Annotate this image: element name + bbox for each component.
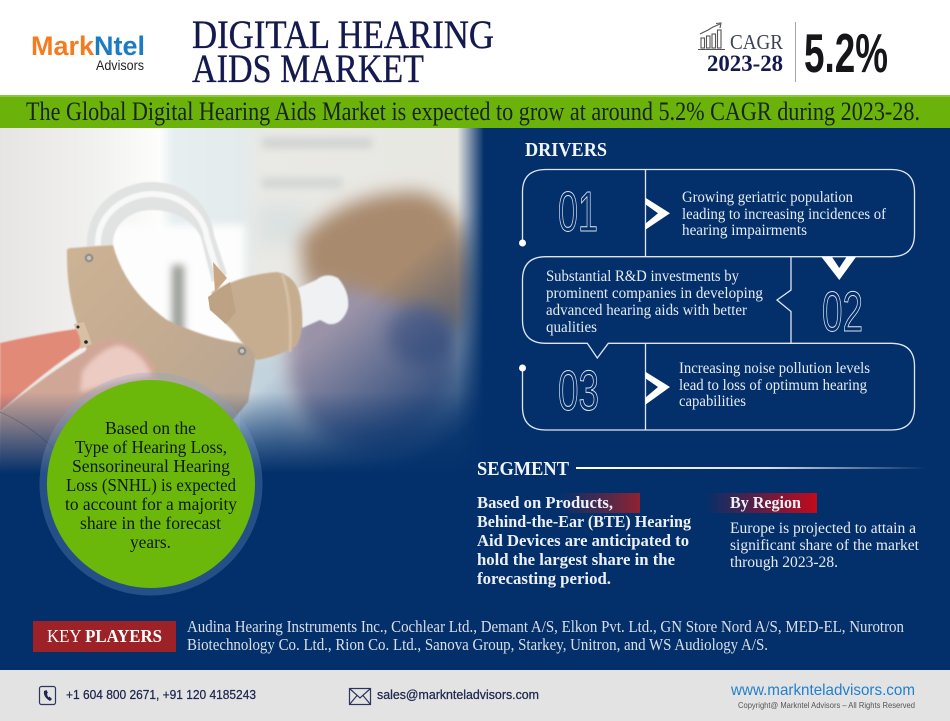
callout: green circle: years. [130, 532, 171, 552]
driver 3 text [679, 360, 870, 410]
driver 2 text [546, 268, 763, 336]
panel: drivers flow [519, 170, 914, 430]
hearing aid body [67, 245, 255, 440]
key players [33, 617, 904, 654]
arrow: driver 1 [645, 198, 670, 230]
blue vignette on photo [240, 228, 483, 470]
callout: green circle: Type of Hearing Loss, [75, 437, 227, 457]
driver 3 text: lead to loss of optimum hearing [679, 377, 867, 394]
segment: products [477, 493, 691, 588]
photo: hearing aid held in fingers [0, 128, 483, 470]
drivers heading: DRIVERS [525, 139, 607, 161]
callout: green circle [40, 372, 262, 596]
icon: growth chart [698, 23, 725, 50]
transparent tube [87, 182, 227, 282]
segment: products: Based on Products, [477, 493, 613, 512]
CAGR block: CAGR [730, 30, 783, 54]
header: logo: MarkNtel [31, 31, 145, 61]
segment: products: hold the largest share in the [477, 550, 675, 569]
footer [0, 670, 950, 721]
thumb and hand [0, 339, 158, 466]
icon: phone [40, 686, 56, 704]
callout: green circle: share in the forecast [80, 513, 221, 533]
arrow: driver 2 [822, 257, 856, 280]
connector outlines [522, 170, 914, 430]
segment heading: SEGMENT [477, 458, 570, 480]
number 02: 02 [822, 280, 863, 344]
footer: www.marknteladvisors.com [730, 682, 915, 699]
footer: sales@marknteladvisors.com [377, 688, 539, 702]
footer: Copyright@ Markntel Advisors – All Rights Reserved [738, 700, 915, 710]
driver 3 text: capabilities [679, 393, 746, 410]
index finger [0, 329, 80, 412]
callout: green circle: Loss (SNHL) is expected [66, 475, 236, 495]
CAGR block: 5.2% [804, 22, 888, 84]
callout: green circle: Sensorineural Hearing [72, 456, 230, 476]
title [192, 12, 494, 91]
number 01: 01 [558, 180, 598, 244]
footer: +1 604 800 2671, +91 120 4185243 [66, 688, 256, 702]
arrow: driver 3 [645, 372, 670, 405]
callout: green circle: Based on the [105, 418, 196, 438]
navy main panel [0, 128, 950, 670]
segment: products: Aid Devices are anticipated to [477, 531, 689, 550]
segment: products: forecasting period. [477, 569, 611, 588]
blurred head: face [286, 260, 454, 450]
number 03: 03 [558, 359, 599, 423]
driver 1 text: leading to increasing incidences of [682, 206, 887, 223]
driver 2 text: advanced hearing aids with better [546, 302, 748, 319]
driver 2 text: qualities [546, 319, 597, 336]
background header [0, 0, 950, 96]
segment: by region: Europe is projected to attain a [730, 520, 916, 537]
key players: Biotechnology Co. Ltd., Rion Co. Ltd., Sanova Group, Starkey, Unitron, and WS Audiology A/S. [187, 635, 768, 654]
segment: products: Behind-the-Ear (BTE) Hearing [477, 512, 691, 531]
segment: by region: significant share of the market [730, 537, 920, 554]
title: DIGITAL HEARING [192, 12, 494, 57]
header: logo: Advisors [96, 58, 144, 73]
CAGR block: 2023-28 [707, 51, 783, 76]
segment: by region: By Region [730, 493, 802, 512]
CAGR block [698, 22, 888, 84]
icon: mail [350, 688, 370, 704]
segment: by region [705, 493, 920, 571]
driver 3 text: Increasing noise pollution levels [679, 360, 870, 377]
earpiece [210, 272, 302, 360]
driver 1 text [682, 189, 887, 239]
driver 1 text: hearing impairments [682, 222, 807, 239]
callout: green circle: to account for a majority [65, 494, 237, 514]
ear tip [298, 275, 348, 328]
blurred head: hair [300, 192, 472, 335]
driver 2 text: Substantial R&D investments by [546, 268, 739, 285]
title: AIDS MARKET [192, 46, 424, 91]
segment: by region: through 2023-28. [730, 554, 838, 571]
driver 2 text: prominent companies in developing [546, 285, 763, 302]
key players: KEY PLAYERS [47, 626, 162, 646]
driver 1 text: Growing geriatric population [682, 189, 853, 206]
